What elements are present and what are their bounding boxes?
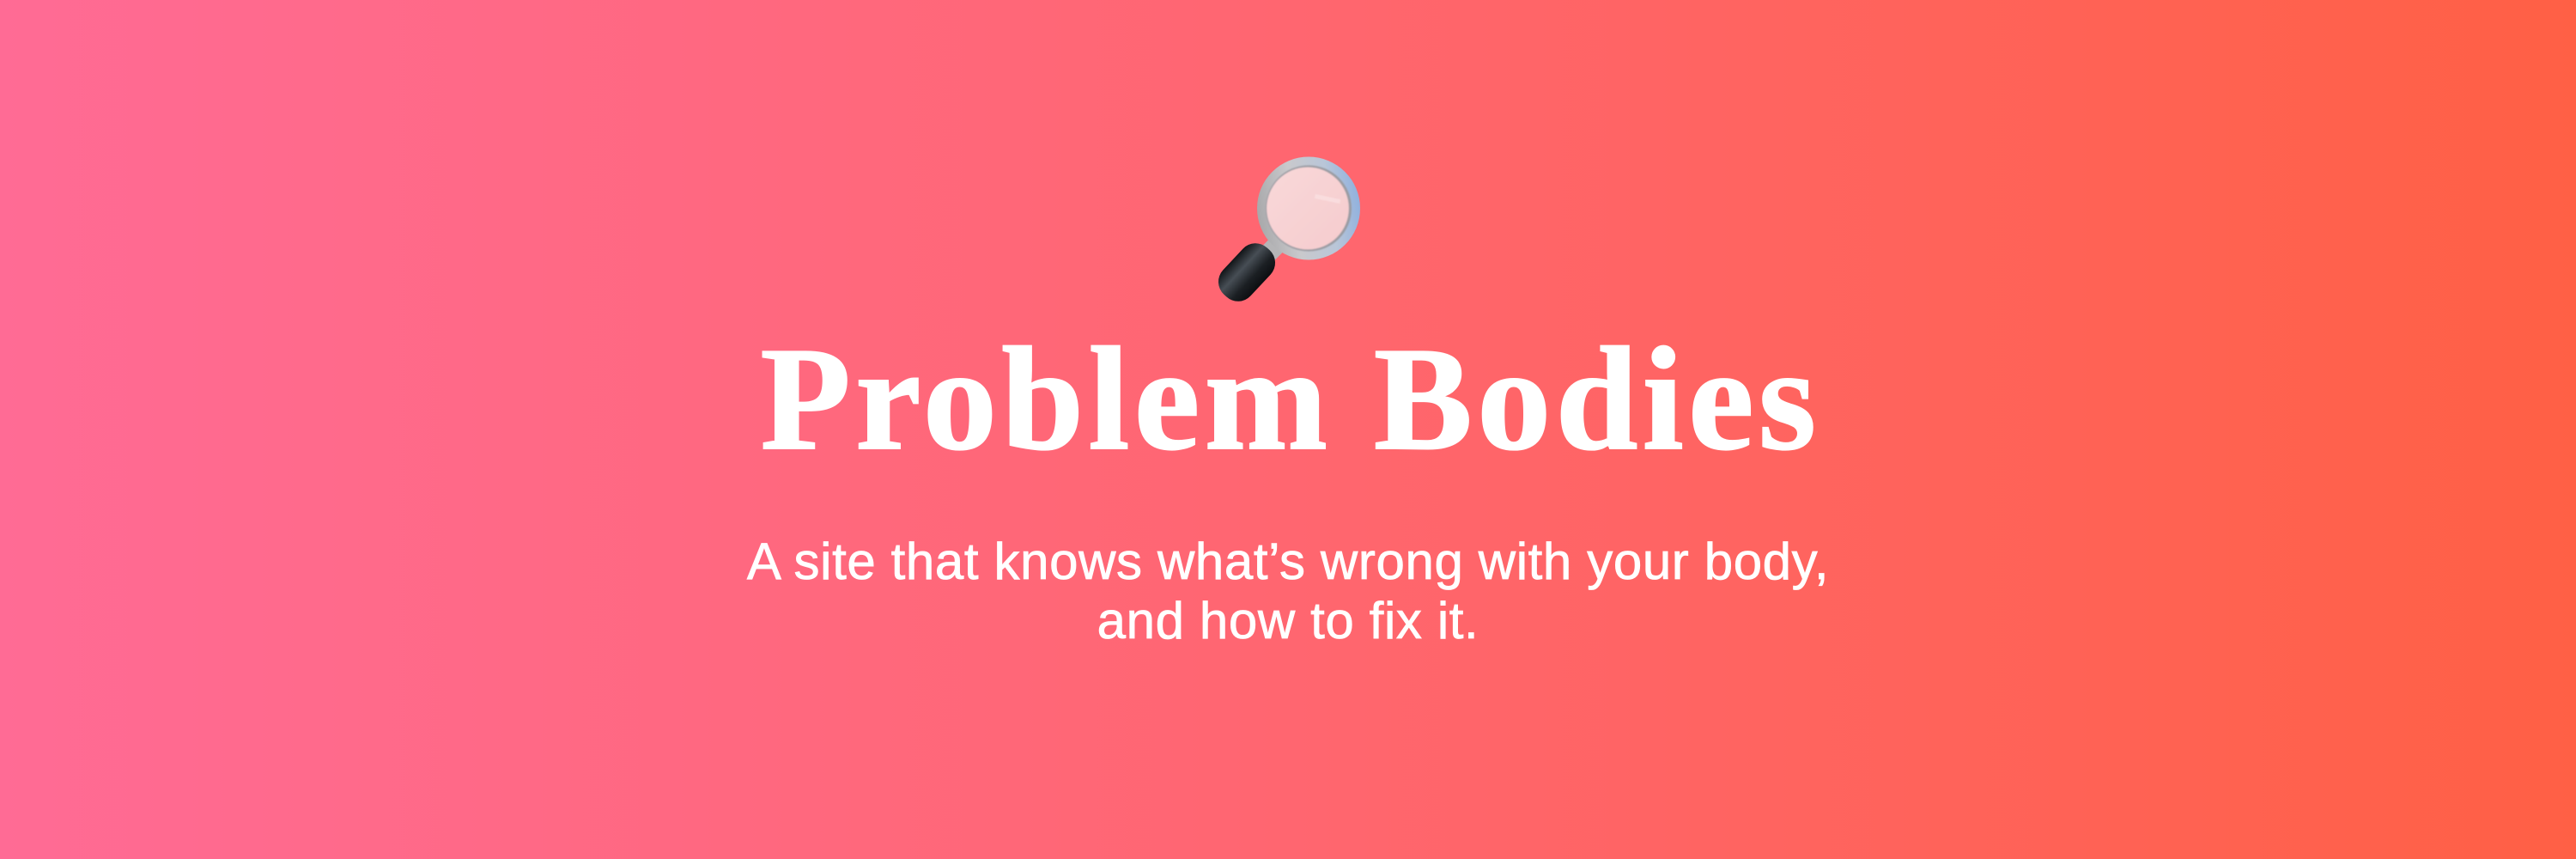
- icon: magnifying glass: [1218, 156, 1360, 302]
- neck: [1256, 231, 1291, 265]
- subtitle: and how to fix it.: [1097, 592, 1479, 649]
- subtitle: [746, 533, 1829, 649]
- subtitle: A site that knows what’s wrong with your body,: [747, 533, 1829, 590]
- title: Problem Bodies: [761, 318, 1820, 481]
